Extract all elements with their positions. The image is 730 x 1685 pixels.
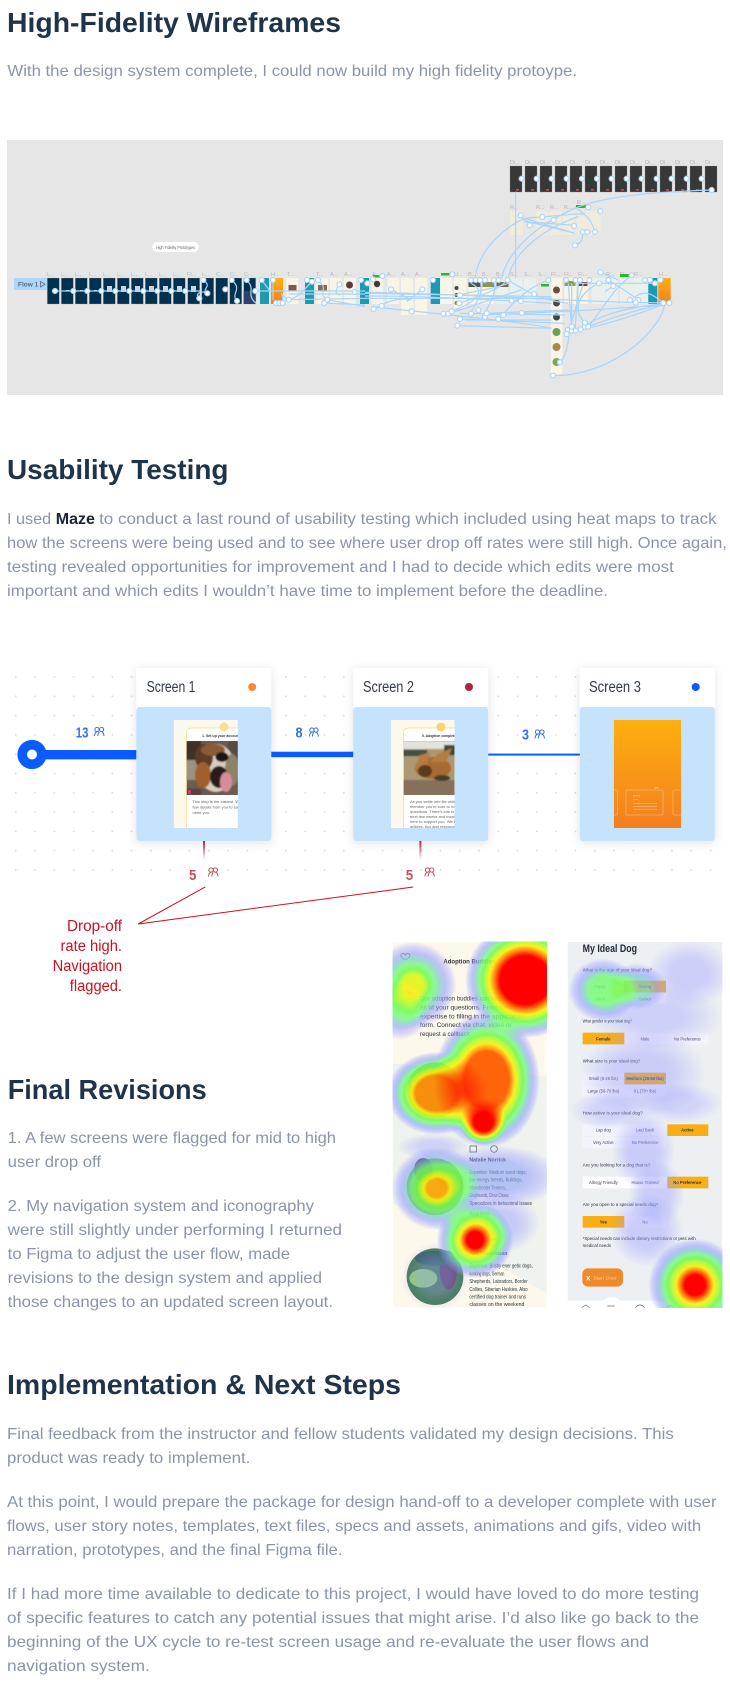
frame labels: Di...	[600, 160, 610, 166]
start over button: Start Over	[593, 1276, 617, 1281]
card: Screen 2	[353, 668, 488, 841]
callout: drop-off rate high: rate high.	[60, 938, 122, 955]
frame labels: A...	[415, 272, 424, 278]
option labels: XL (70+ lbs)	[634, 1088, 657, 1093]
call icons	[401, 953, 497, 1246]
heatmap: My Ideal Dog screen	[568, 942, 722, 1308]
card: Screen 3	[580, 668, 715, 841]
panel: Figma prototype flow map	[7, 140, 723, 395]
text: final revisions list: 1. A few screens were flagged for mid to high	[8, 1130, 336, 1147]
text: usability testing paragraph: I used	[7, 511, 51, 528]
connector nodes	[52, 277, 363, 305]
frame labels: R...	[634, 272, 643, 278]
text: final revisions list	[7, 1130, 342, 1311]
heatmap: Adoption Buddies screen: Specializes in behavioral issues	[469, 1201, 532, 1207]
pill: High Fidelity Prototypes: High Fidelity Prototypes	[156, 245, 195, 250]
frame labels: Di...	[630, 160, 640, 166]
frame labels: R...	[620, 272, 629, 278]
question labels: What size is your ideal dog?	[583, 1059, 641, 1065]
screen thumbnail: orange	[614, 720, 682, 828]
frame labels: R...	[536, 205, 545, 211]
frames: pale blue screens	[496, 278, 648, 304]
frame labels: L...	[131, 272, 139, 278]
screen title: My Ideal Dog	[583, 943, 637, 955]
screen thumbnail: dog photo: This step is the easiest. We only need a	[192, 799, 264, 804]
screen thumbnail: dog photo: need you.	[192, 810, 210, 815]
heatmap: Adoption Buddies screen: Collies, Siberian Huskies. Also	[469, 1287, 528, 1293]
frame marks: red accents	[516, 189, 714, 191]
heatmap: Adoption Buddies screen: Greyhounds, Chow Chows.	[469, 1193, 509, 1199]
heatmap: Adoption Buddies screen: classes on the weekend	[469, 1302, 524, 1308]
frame labels: L...	[202, 272, 210, 278]
text: usability testing paragraph: testing revealed opportunities for improvement and I had to decide which edits were most	[7, 559, 674, 576]
avatars	[408, 1062, 456, 1118]
count: 3 users	[522, 726, 544, 744]
text: intro paragraph: With the design system complete, I could now build my high fidelity protoype.	[7, 63, 577, 80]
frame labels: Di...	[705, 160, 715, 166]
frame labels: R...	[606, 272, 615, 278]
heatmap: Adoption Buddies screen: working dogs, German	[469, 1271, 504, 1277]
start over button: X	[586, 1275, 591, 1282]
text: implementation paragraphs: product was ready to implement.	[7, 1450, 250, 1467]
screen intro text: all of your questions. From breed	[420, 1004, 517, 1011]
frames: dark navy onboarding screens	[47, 278, 256, 304]
screen thumbnail: dog in sand: member you're sure to have plenty	[410, 804, 471, 809]
text: implementation paragraphs: navigation system.	[7, 1658, 150, 1675]
frame labels: S...	[524, 272, 533, 278]
card body	[353, 668, 488, 841]
frame labels: C...	[244, 272, 253, 278]
callout: drop-off rate high	[53, 918, 123, 995]
heatmap: Adoption Buddies screen: Ask Thorkildsen	[469, 1251, 508, 1257]
count: 8 users: 8	[296, 724, 302, 742]
frame labels: Di...	[510, 160, 520, 166]
screen thumbnail: dog in sand: here to support you. We have great	[410, 819, 474, 824]
frame labels: Fl...	[564, 272, 574, 278]
heatmap: Adoption Buddies screen: Read More	[469, 1212, 489, 1218]
drop-off: screen 1 stem	[203, 841, 205, 860]
card body	[136, 668, 271, 841]
frame labels: Fl...	[551, 272, 561, 278]
callout: drop-off rate high: Navigation	[53, 958, 122, 975]
frame labels: L...	[103, 272, 111, 278]
option labels: Small (8-25 lbs)	[589, 1076, 618, 1081]
option labels: Female	[596, 1036, 611, 1041]
frame labels: B...	[496, 272, 505, 278]
heading: Implementation & Next Steps: Implementation & Next Steps	[7, 1369, 401, 1400]
text: implementation paragraphs	[7, 1426, 717, 1675]
frame labels: L...	[47, 272, 55, 278]
frame labels: Di...	[555, 160, 565, 166]
flow start marker	[17, 740, 47, 769]
option labels: No Preference	[673, 1180, 702, 1185]
text: implementation paragraphs: If I had more time available to dedicate to this project, I would have loved to do more testing	[7, 1586, 699, 1603]
option labels: Large (50-70 lbs)	[588, 1088, 620, 1093]
card: Screen 1	[136, 668, 271, 841]
flow line: 8 users	[271, 752, 354, 757]
text: usability testing paragraph: to conduct a last round of usability testing which included using heat maps to track	[99, 511, 718, 528]
frame labels: Fl...	[187, 272, 197, 278]
screen title: Adoption Buddies	[443, 959, 496, 965]
flow tag: Flow 1	[14, 278, 47, 290]
frame labels: Di...	[540, 160, 550, 166]
question labels: What gender is your ideal dog?	[583, 1019, 632, 1025]
heading: High-Fidelity Wireframes: High-Fidelity Wireframes	[7, 7, 341, 38]
frames: orange screens	[271, 278, 671, 304]
status dot	[248, 683, 256, 691]
screen thumbnail: dog photo: 1. Set up your account	[202, 733, 241, 738]
option labels: Very Active	[593, 1140, 614, 1145]
frame labels: Di...	[525, 160, 535, 166]
card title: Screen 1	[147, 679, 195, 696]
count: 8 users	[296, 724, 318, 742]
text: usability testing paragraph: how the screens were being used and to see where user drop off rates were still high. Once again,	[7, 535, 727, 552]
screen thumbnail: dog in sand: As you settle into life with your	[410, 799, 464, 804]
frame labels: A...	[330, 272, 339, 278]
screen intro text: Our adoption buddies can help with	[420, 996, 515, 1003]
text: implementation paragraphs: Final feedback from the instructor and fellow students validated my design decisions. This	[7, 1426, 674, 1443]
callout: drop-off rate high: Drop-off	[67, 918, 123, 935]
frame labels: R...	[564, 205, 573, 211]
text: implementation paragraphs: flows, user story notes, templates, text files, specs and assets, animations and gifs, video with	[7, 1518, 701, 1535]
text: final revisions list: to Figma to adjust the user flow, made	[8, 1246, 290, 1263]
frames: cream screens	[286, 278, 588, 374]
question labels: How active is your ideal dog?	[583, 1110, 643, 1116]
frame labels: T...	[287, 272, 295, 278]
screen thumbnail: dog in sand: next few weeks and months and	[410, 814, 467, 819]
option labels: Puppy	[594, 984, 607, 989]
frame labels: Di...	[585, 160, 595, 166]
screen thumbnail: dog in sand	[391, 720, 455, 828]
card title: Screen 3	[589, 679, 641, 696]
pill: High Fidelity Prototypes	[152, 242, 199, 252]
text: usability testing paragraph: important and which edits I wouldn’t have time to implement before the deadline.	[7, 583, 608, 600]
frames: dark grey screens	[510, 166, 717, 192]
text: implementation paragraphs: beginning of the UX cycle to re-test screen usage and re-evaluate the user flows and	[7, 1634, 649, 1651]
frame labels: L...	[75, 272, 83, 278]
flow line: 3 users	[488, 754, 580, 756]
text: final revisions list: 2. My navigation system and iconography	[8, 1198, 314, 1215]
frame labels: S...	[510, 272, 519, 278]
heatmap: Adoption Buddies screen: low energy breeds, Bulldogs,	[469, 1178, 523, 1184]
screen intro text: request a callback.	[420, 1031, 472, 1038]
flow tag: Flow 1: Flow 1	[18, 282, 39, 288]
drop-off count: screen 1	[189, 867, 218, 884]
option labels: Lap dog	[596, 1128, 612, 1133]
frames: photos and avatars	[288, 281, 588, 366]
callout: drop-off rate high: flagged.	[70, 978, 122, 995]
frame labels: Di...	[690, 160, 700, 166]
frame labels: A...	[401, 272, 410, 278]
frame labels: L...	[61, 272, 69, 278]
frame labels: L...	[89, 272, 97, 278]
start over button	[582, 1268, 623, 1287]
heat overlay	[392, 942, 547, 1307]
count: 13 users: 13	[76, 724, 88, 742]
text: final revisions list: were still slightly under performing I returned	[7, 1222, 342, 1239]
screen thumbnail: dog in sand: questions. There's lots to learn in	[410, 809, 468, 814]
heatmap: Adoption Buddies screen	[392, 942, 547, 1308]
text: implementation paragraphs: of specific features to catch any potential issues that might arise. I’d also like go back to the	[7, 1610, 699, 1627]
heat overlay	[570, 944, 722, 1308]
frame labels: Di...	[570, 160, 580, 166]
card body	[580, 668, 715, 841]
frame labels: R...	[510, 205, 519, 211]
text: final revisions list: user drop off	[8, 1154, 102, 1171]
frames: faded results screens	[510, 211, 601, 235]
flow line: 13 users	[44, 750, 137, 759]
heatmap: Adoption Buddies screen: Expertise: Medium sized dogs,	[469, 1170, 527, 1176]
callout lines: drop-off pointers	[138, 887, 413, 924]
green status tags	[373, 205, 629, 286]
status dot	[692, 683, 700, 691]
frame labels: S...	[538, 272, 547, 278]
option labels: House Trained	[631, 1180, 659, 1185]
connectors: right flow	[365, 190, 712, 376]
frames: teal screens	[260, 278, 657, 304]
frame labels: A...	[387, 272, 396, 278]
frame labels: R...	[550, 205, 559, 211]
screen intro text: expertise to filling in the application	[420, 1013, 524, 1020]
frame labels: L...	[173, 272, 181, 278]
option labels: Medium (25-50 lbs)	[626, 1076, 664, 1081]
screen intro text	[420, 996, 524, 1038]
drop-off count: screen 1: 5	[189, 867, 196, 884]
frame labels: L...	[117, 272, 125, 278]
frame labels: Fl...	[578, 272, 588, 278]
option labels: Male	[640, 1036, 650, 1041]
screen thumbnail: dog in sand: articles, tips and resources and a	[410, 824, 469, 829]
frame labels: T...	[316, 272, 324, 278]
frame labels: B...	[468, 272, 477, 278]
question labels: Are you open to a special needs dog?	[583, 1202, 659, 1208]
frame marks	[66, 286, 196, 292]
option labels: No Preference	[674, 1036, 701, 1041]
frame labels: Di...	[615, 160, 625, 166]
question labels: What is the age of your ideal dog?	[583, 967, 652, 973]
question labels: *Special needs can include dietary restrictions or pets with	[583, 1236, 696, 1242]
chart: Maze user flow with drop-off	[15, 668, 716, 884]
frame labels: C...	[216, 272, 225, 278]
option labels: Adult	[595, 997, 606, 1002]
screen thumbnail: dog photo: few details from you to save and review	[192, 804, 263, 810]
option labels: Young	[639, 984, 652, 989]
option labels: No Preference	[632, 1140, 659, 1145]
connector nodes: right side	[365, 176, 714, 378]
connectors: left flow	[55, 280, 367, 307]
drop-off count: screen 2	[406, 867, 434, 884]
text: final revisions list: those changes to an updated screen layout.	[8, 1294, 333, 1311]
frame labels: B...	[482, 272, 491, 278]
text: implementation paragraphs: At this point, I would prepare the package for design hand-off to a developer complete with user	[7, 1494, 717, 1511]
option labels: No	[642, 1220, 648, 1225]
selected options	[583, 981, 708, 1228]
frame labels: H...	[659, 272, 668, 278]
heatmap: Adoption Buddies screen: Shepherds, Labradors, Border	[469, 1279, 528, 1285]
heatmap: Adoption Buddies screen: Expertise: Bristly ener getic dogs,	[469, 1263, 533, 1269]
buddy bios: Natalie Norrick	[469, 1158, 507, 1164]
frame labels: A...	[344, 272, 353, 278]
option labels	[588, 984, 702, 1225]
text: usability testing paragraph	[7, 511, 727, 600]
frame labels	[47, 160, 715, 278]
option labels: Allergy Friendly	[589, 1180, 619, 1185]
frame labels: C...	[230, 272, 239, 278]
drop-off count: screen 2: 5	[406, 867, 413, 884]
heatmap: Adoption Buddies screen: Manchester Terriers,	[469, 1185, 506, 1191]
frame labels: A...	[372, 272, 381, 278]
option labels: Laid Back	[636, 1128, 655, 1133]
frame labels: Di...	[660, 160, 670, 166]
card title: Screen 2	[363, 679, 414, 696]
frame labels: L...	[159, 272, 167, 278]
text: usability testing paragraph: Maze	[56, 511, 95, 528]
heading: Final Revisions: Final Revisions	[8, 1074, 207, 1105]
frame labels: L...	[145, 272, 153, 278]
screen intro text: form. Connect via chat, video or	[420, 1022, 512, 1029]
option labels: Yes	[600, 1220, 608, 1225]
frame labels: R...	[577, 200, 586, 206]
frame labels: H...	[271, 272, 280, 278]
question labels	[583, 967, 696, 1249]
frame labels: U...	[454, 272, 463, 278]
count: 3 users: 3	[522, 726, 529, 744]
status dot	[465, 683, 473, 691]
question labels: medical needs	[583, 1243, 611, 1249]
heatmap: Adoption Buddies screen: certified dog trainer and runs	[469, 1295, 526, 1301]
frame: photo night screen	[244, 291, 256, 304]
option labels: Active	[681, 1128, 694, 1133]
question labels: Are you looking for a dog that is?	[583, 1163, 651, 1169]
screen thumbnail: dog photo	[174, 720, 238, 828]
text: final revisions list: revisions to the design system and applied	[8, 1270, 322, 1287]
count: 13 users	[76, 724, 104, 742]
option labels: Senior	[639, 997, 652, 1002]
heading: Usability Testing: Usability Testing	[7, 454, 228, 485]
drop-off: screen 2 stem	[419, 841, 421, 860]
frame labels: Di...	[675, 160, 685, 166]
option buttons	[582, 1033, 708, 1188]
bottom nav	[568, 1298, 702, 1308]
frame labels: Di...	[645, 160, 655, 166]
screen thumbnail: dog in sand: 5. Adoption complete	[422, 733, 457, 738]
text: implementation paragraphs: narration, prototypes, and the final Figma file.	[7, 1542, 342, 1559]
